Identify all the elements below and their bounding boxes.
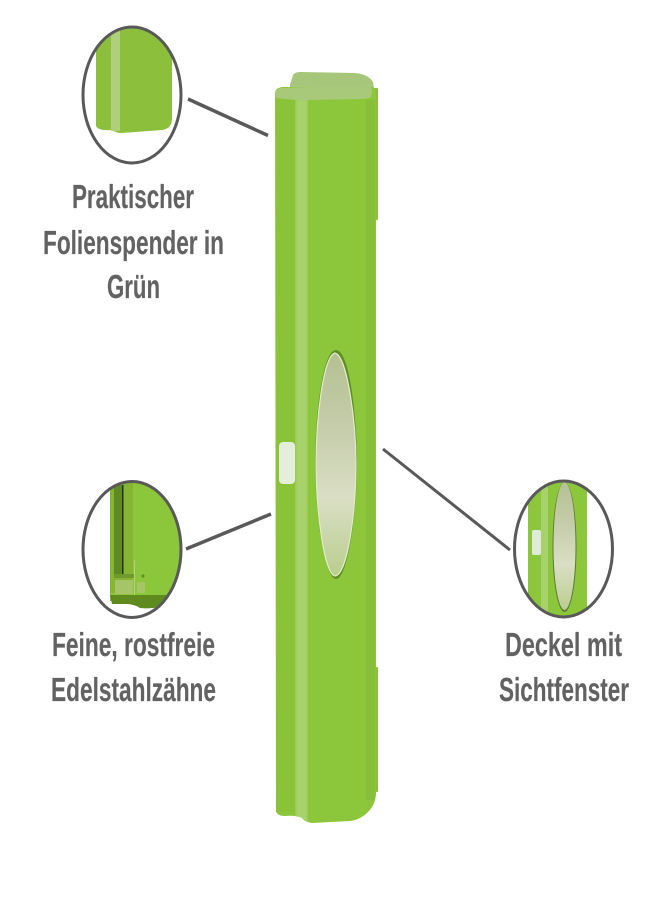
connector line: top [188,99,268,136]
window pane [316,353,356,576]
left shaded edge [276,100,295,812]
top cap band [275,85,372,101]
ring [83,482,181,618]
right shaded edge [366,100,375,800]
cropped window view [528,481,587,617]
cropped teeth view [110,481,185,608]
label: Feine, rostfreie Edelstahlzähne: Edelstahlzähne [51,671,216,708]
product: foil dispenser [275,72,378,823]
dispenser rear lid [290,72,374,88]
label: Feine, rostfreie Edelstahlzähne: Feine, rostfreie [52,626,215,663]
label: Praktischer Folienspender in Grün: Grün [107,268,160,305]
connector line: teeth [186,514,271,549]
light vertical stripe [295,100,308,821]
dispenser body [275,87,376,823]
cropped end view [96,27,172,133]
label: Praktischer Folienspender in Grün: Folienspender in [43,224,224,261]
window [315,350,357,579]
label: Deckel mit Sichtfenster [499,626,629,708]
callout circle: window [514,481,612,617]
callout circle: top [83,27,181,163]
dispenser side tab bottom [374,667,378,792]
ring [83,27,181,163]
window rim [315,350,357,579]
callout circle: teeth [83,481,185,618]
slider button [279,442,295,484]
dispenser side tab top [374,88,378,220]
connector line: window [383,449,510,550]
ring [514,481,612,617]
label: Praktischer Folienspender in Grün [43,178,224,305]
label: Feine, rostfreie Edelstahlzähne [51,626,216,708]
label: Praktischer Folienspender in Grün: Praktischer [72,178,194,215]
